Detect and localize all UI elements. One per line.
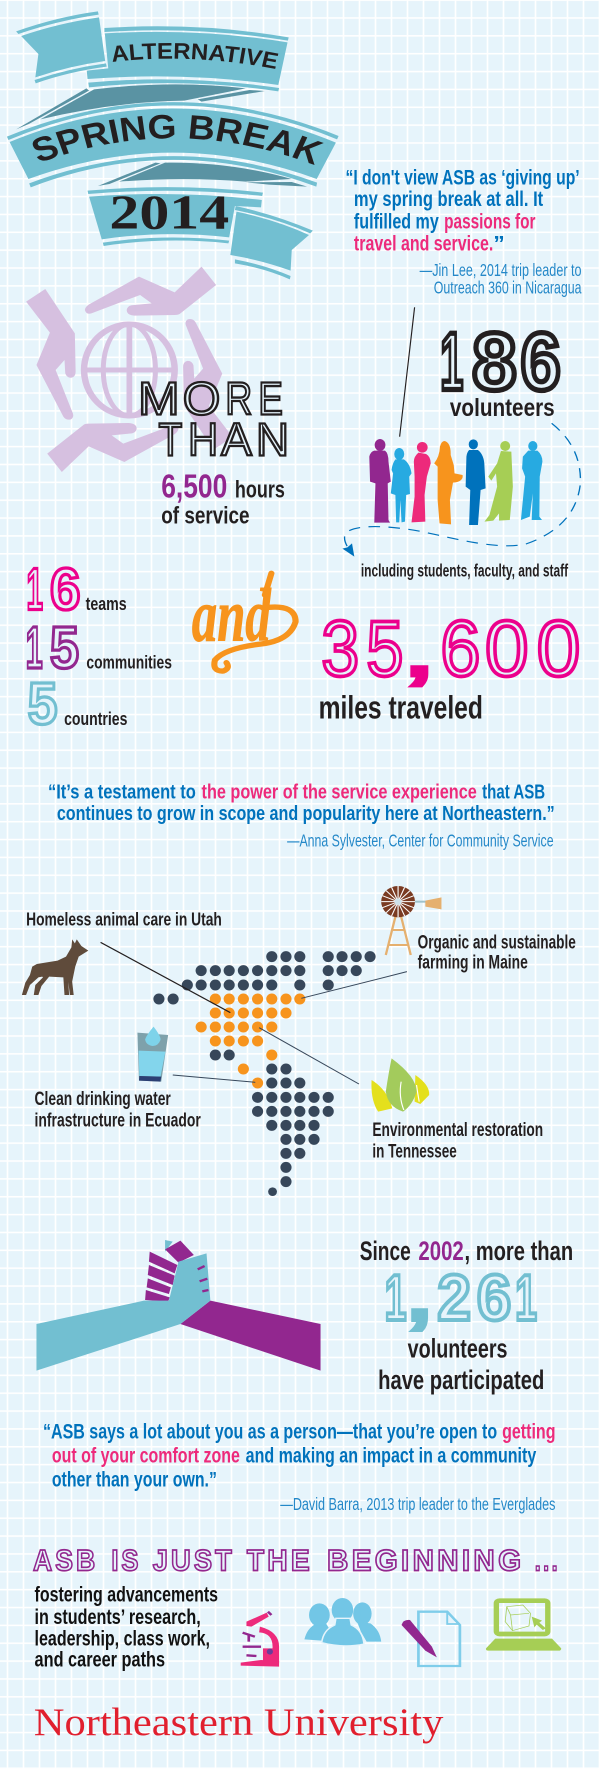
heading: ASB is just the beginning	[33, 1544, 560, 1577]
stat: 1,261	[385, 1262, 537, 1334]
icon: document and pen	[402, 1612, 460, 1666]
stat: 5 countries: countries	[64, 709, 127, 730]
text: fostering advancements: leadership, class work,	[35, 1626, 210, 1650]
heading: ASB is just the beginning: ASB	[33, 1544, 98, 1577]
heading: ASB is just the beginning: ...	[535, 1544, 560, 1577]
stat: 35,600: ,	[402, 605, 437, 693]
map: dark dots	[153, 951, 376, 1196]
quote: Jin Lee: fulfilled my	[354, 209, 439, 233]
icon: microscope	[241, 1612, 279, 1667]
stat: 6,500 hours of service: of service	[161, 503, 250, 529]
stat: 186	[440, 315, 561, 407]
quote: Jin Lee: passions for	[444, 209, 536, 233]
callout: clean water	[35, 1088, 201, 1131]
heading: ASB is just the beginning: THE	[247, 1544, 313, 1577]
more than: N	[256, 414, 289, 466]
text: since 2002: Since	[360, 1237, 411, 1266]
text: fostering advancements: fostering advancements	[35, 1582, 218, 1606]
callout: clean water: Clean drinking water	[35, 1088, 171, 1110]
icon: dog	[22, 939, 88, 995]
stat: 35,600: 3	[321, 605, 359, 693]
panel: travel stats	[26, 556, 580, 850]
panel: hours of service	[26, 267, 580, 580]
more than: M	[138, 373, 180, 425]
stat: 35,600	[321, 605, 580, 693]
icon: people	[304, 1598, 381, 1646]
stat: 35,600: 0	[485, 605, 529, 693]
stat: 186: 1	[440, 315, 463, 407]
stat: 6,500 hours of service	[161, 467, 285, 529]
stat: 1,261: 2	[437, 1262, 471, 1334]
banner: alternative: ALTERNATIVE	[112, 43, 278, 69]
callout: homeless animal care: Homeless animal care in Utah	[26, 910, 222, 930]
panel: ASB is just the beginning	[33, 1544, 561, 1744]
callout lines	[101, 942, 407, 1084]
stat: 15 communities	[26, 614, 172, 681]
quote: Jin Lee	[345, 165, 582, 297]
arrow: dashed loop	[342, 423, 580, 557]
heading: ASB is just the beginning: JUST	[153, 1544, 235, 1577]
quote: David Barra: other than your own.”	[52, 1467, 217, 1491]
stat: 6,500 hours of service: hours	[235, 477, 285, 503]
callout: organic farming: farming in Maine	[418, 952, 528, 973]
more than: A	[221, 414, 252, 466]
stat: 1,261: 1	[515, 1262, 537, 1334]
heading: ASB is just the beginning: IS	[111, 1544, 141, 1577]
more than: H	[188, 414, 218, 466]
icon: laptop	[486, 1601, 561, 1651]
banner: alternative	[86, 26, 289, 92]
text: since 2002: 2002	[418, 1237, 464, 1266]
stat: 35,600: 5	[366, 605, 403, 693]
quote: Anna Sylvester: that ASB	[482, 780, 545, 803]
banner: left tail	[16, 11, 107, 83]
quote: Anna Sylvester: the power of the service experience	[202, 780, 477, 803]
stat: 35,600: 0	[537, 605, 580, 693]
stat: 15 communities: communities	[86, 653, 172, 673]
banner: spring break: SPRING BREAK	[32, 114, 324, 165]
quote: David Barra: out of your comfort zone	[52, 1443, 240, 1467]
label: miles traveled: miles traveled	[319, 691, 483, 726]
banner: 2014: 2014	[109, 187, 229, 240]
icon: volunteer silhouettes	[369, 439, 542, 525]
text: volunteers have participated: volunteers	[408, 1334, 507, 1364]
stat: 186: 6	[521, 315, 561, 407]
map: orange dots	[196, 993, 305, 1088]
panel: title banners	[7, 11, 582, 297]
icon: windmill	[381, 886, 441, 955]
banner: 2014	[88, 187, 263, 246]
stat: 5 countries: 5	[28, 670, 58, 737]
banner: right tail	[230, 206, 313, 279]
stat: 16 teams	[26, 556, 127, 623]
stat: 5 countries	[28, 670, 127, 737]
stat: 1,261: ,	[408, 1262, 431, 1334]
callout: clean water: infrastructure in Ecuador	[35, 1110, 201, 1131]
stat: 35,600: 6	[440, 605, 481, 693]
stat: 16 teams: 1	[26, 556, 43, 623]
text: since 2002	[360, 1237, 573, 1266]
more than: R	[225, 373, 252, 425]
stat: 16 teams: teams	[86, 594, 127, 615]
callout: environmental restoration: in Tennessee	[372, 1141, 457, 1162]
quote: Jin Lee: ”	[493, 231, 505, 255]
leader line	[400, 307, 415, 437]
stat: 15 communities: 1	[26, 614, 43, 681]
quote: David Barra	[43, 1419, 555, 1514]
callout: organic farming	[418, 932, 576, 973]
quote: David Barra: getting	[502, 1419, 555, 1443]
script: and: and	[192, 575, 272, 657]
panel: service map	[22, 886, 576, 1196]
quote: Jin Lee: travel and service.	[354, 231, 493, 255]
banner folds	[16, 84, 307, 187]
stat: 6,500 hours of service: 6,500	[161, 467, 227, 505]
icon: leaves	[371, 1058, 429, 1112]
text: fostering advancements	[35, 1582, 218, 1671]
icon: handshake	[36, 1240, 321, 1371]
logo: Northeastern University: Northeastern University	[34, 1701, 444, 1744]
text: fostering advancements: in students’ research,	[35, 1605, 201, 1629]
stat: 15 communities: 5	[50, 614, 79, 681]
quote: Anna Sylvester	[48, 780, 555, 850]
stat: 1,261: 6	[477, 1262, 511, 1334]
text: fostering advancements: and career paths	[35, 1647, 165, 1671]
callout: environmental restoration	[372, 1119, 543, 1162]
more than: O	[183, 373, 220, 425]
more than	[138, 373, 289, 466]
banner: spring break	[7, 102, 338, 188]
text: volunteers have participated	[378, 1334, 544, 1395]
script: and	[192, 573, 296, 671]
more than: E	[258, 373, 283, 425]
stat: 16 teams: 6	[50, 556, 81, 623]
label: volunteers: volunteers	[450, 393, 555, 422]
heading: ASB is just the beginning: BEGINNING	[327, 1544, 524, 1577]
stat: 1,261: 1	[385, 1262, 407, 1334]
icon: hands around globe	[26, 267, 233, 472]
more than: T	[159, 414, 182, 466]
quote: Anna Sylvester: “It’s a testament to	[48, 780, 196, 803]
panel: volunteers since 2002	[36, 1237, 573, 1514]
stat: 186: 8	[472, 315, 517, 407]
icon: water glass	[137, 1027, 168, 1082]
